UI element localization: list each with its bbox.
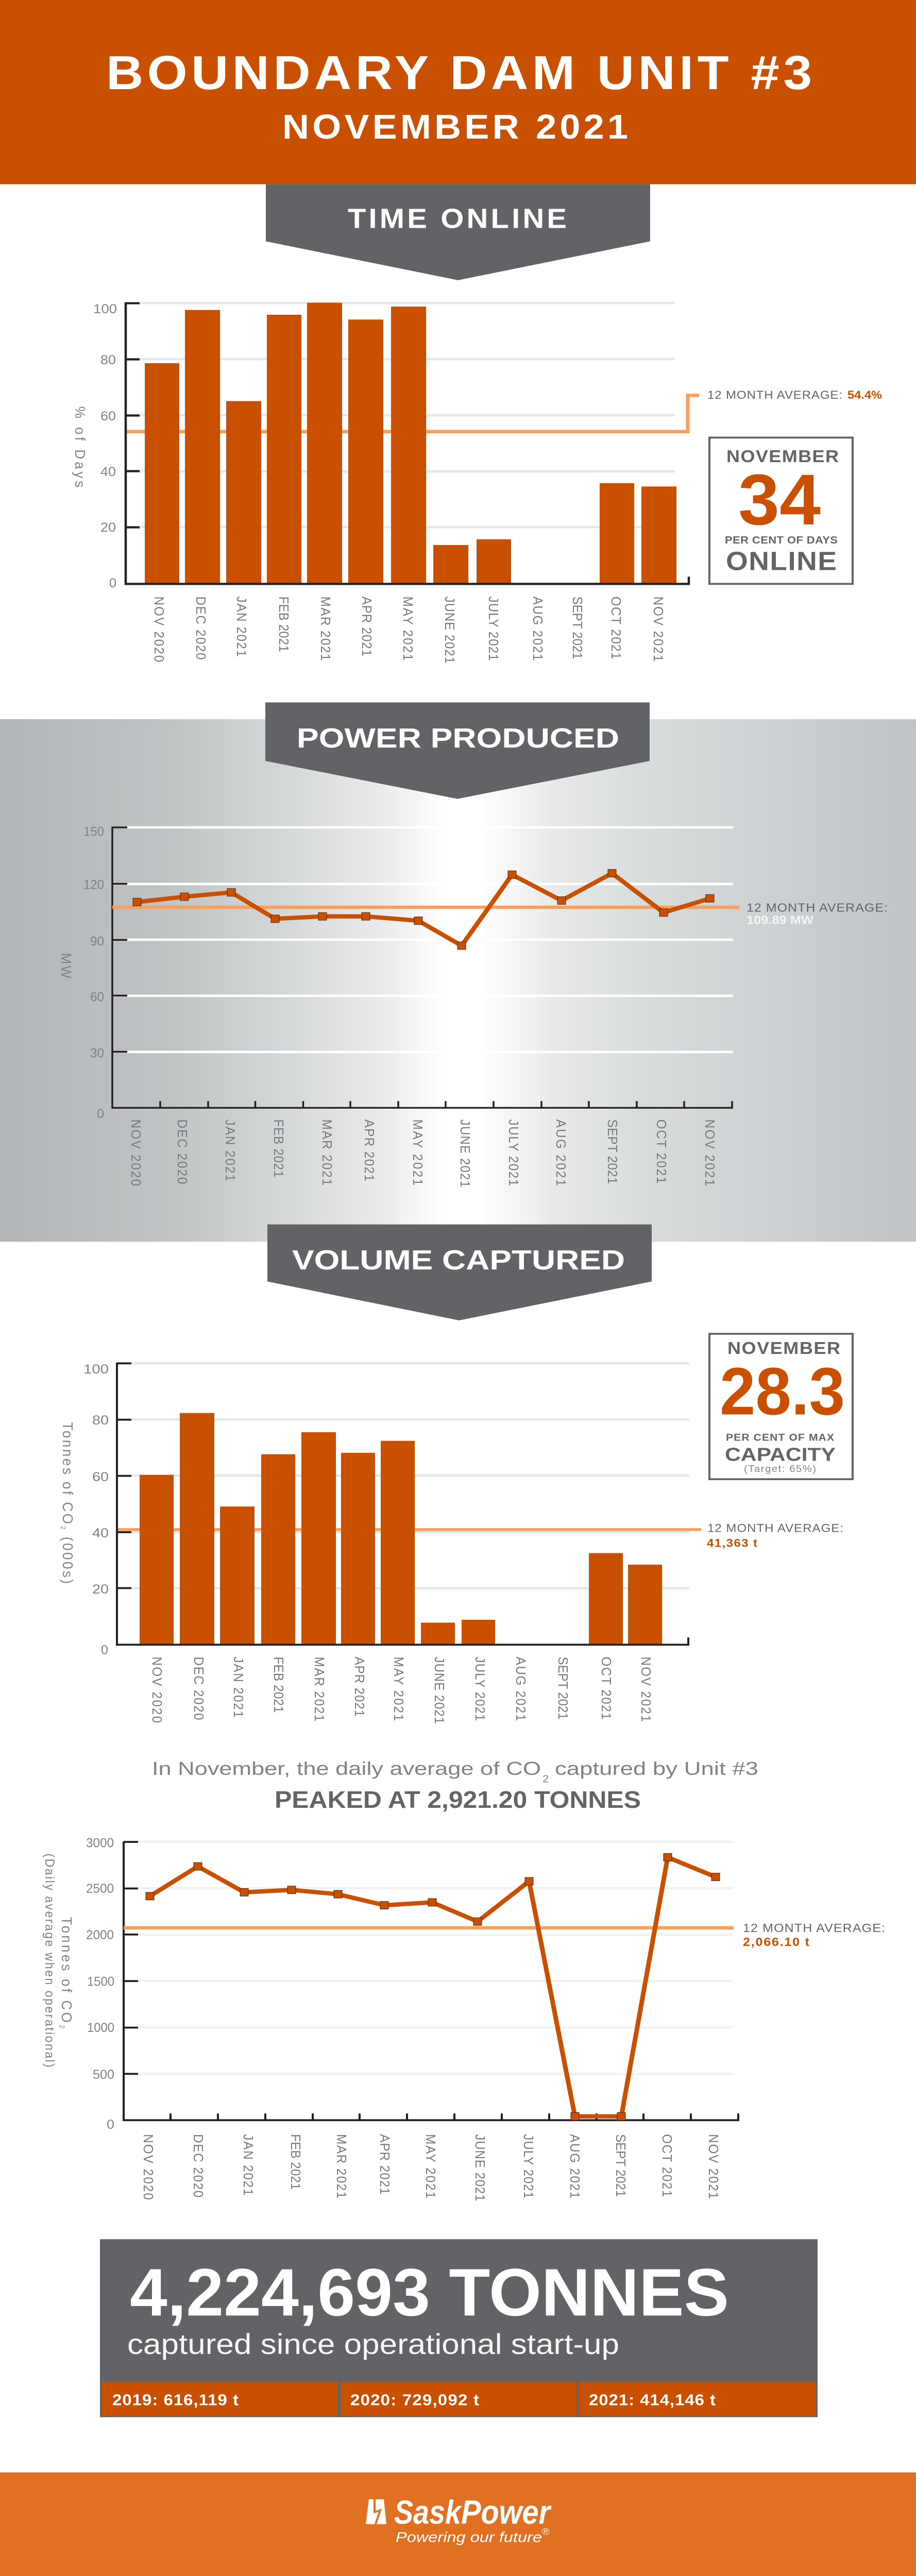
saskpower wordmark: Sask xyxy=(394,2494,463,2531)
section banner: volume captured xyxy=(267,1225,652,1320)
x axis labels: power produced: JAN 2021 xyxy=(223,1120,238,1181)
y axis labels: power produced: 30 xyxy=(90,1045,104,1060)
y axis labels: volume captured: 60 xyxy=(92,1469,109,1484)
x axis labels: time online: SEPT 2021 xyxy=(570,597,585,659)
y axis labels: time online: 40 xyxy=(100,464,116,479)
y axis labels: daily average captured: 0 xyxy=(107,2117,114,2132)
total caption: captured since operational start-up xyxy=(127,2329,619,2360)
footer band xyxy=(0,2472,916,2576)
x axis labels: power produced: MAY 2021 xyxy=(410,1120,425,1185)
section banner: time online xyxy=(266,184,650,280)
data markers: power produced xyxy=(133,869,714,950)
x axis labels: power produced: NOV 2020 xyxy=(128,1120,143,1186)
callout box: 28.3 per cent of max capacity: PER CENT OF MAX xyxy=(726,1432,834,1443)
axes: daily average captured xyxy=(124,1841,738,2120)
y axis labels: daily average captured: 2500 xyxy=(86,1881,114,1896)
x axis labels: time online: MAR 2021 xyxy=(318,597,333,660)
x axis labels: daily average captured: NOV 2020 xyxy=(141,2134,156,2200)
average label: power produced: 109.89 MW xyxy=(747,913,813,927)
average line: time online xyxy=(126,395,699,432)
callout box: 28.3 per cent of max capacity: CAPACITY xyxy=(725,1444,836,1465)
x axis labels: daily average captured: APR 2021 xyxy=(377,2134,392,2195)
callout box: 28.3 per cent of max capacity: 28.3 xyxy=(720,1354,845,1429)
axes: volume captured xyxy=(117,1363,688,1645)
y axis title: daily average captured: Tonnes of CO xyxy=(59,1917,75,2023)
y axis labels: daily average captured: 1500 xyxy=(87,1974,114,1989)
y axis title: power produced: MW xyxy=(58,953,74,978)
x axis labels: daily average captured: JUNE 2021 xyxy=(472,2134,487,2201)
callout box: 34 per cent online xyxy=(709,437,853,584)
yearly totals strip: 2021: 414,146 t xyxy=(589,2391,716,2409)
x axis labels: time online: NOV 2020 xyxy=(151,597,166,662)
x axis labels: volume captured: MAR 2021 xyxy=(312,1657,327,1721)
x axis labels: daily average captured: MAR 2021 xyxy=(334,2134,349,2198)
section banner: power produced: POWER PRODUCED xyxy=(297,722,619,753)
axes: power produced xyxy=(112,827,732,1108)
x axis labels: power produced: AUG 2021 xyxy=(553,1120,568,1186)
y axis labels: volume captured: 20 xyxy=(92,1582,109,1597)
line chart: power produced xyxy=(58,824,888,1188)
header band xyxy=(0,0,916,184)
x axis labels: volume captured: NOV 2021 xyxy=(638,1657,653,1722)
callout box: 34 per cent online: NOVEMBER xyxy=(726,447,839,466)
x axis labels: time online: JAN 2021 xyxy=(234,597,249,657)
y axis labels: time online: 0 xyxy=(109,575,116,590)
x axis labels: time online: JUNE 2021 xyxy=(442,597,457,664)
average label: volume captured: 41,363 t xyxy=(707,1536,757,1549)
average label: time online: 54.4% xyxy=(847,388,882,401)
average line: volume captured xyxy=(117,1528,701,1531)
average label: daily average captured: 2,066.10 t xyxy=(743,1936,809,1949)
y axis labels: power produced: 150 xyxy=(83,824,104,839)
y axis labels: power produced: 120 xyxy=(83,877,104,892)
average label: time online: 12 MONTH AVERAGE: xyxy=(707,388,842,401)
yearly totals strip xyxy=(102,2382,816,2416)
y axis labels: time online: 20 xyxy=(100,520,116,535)
panel: total captured xyxy=(100,2239,818,2417)
x axis labels: volume captured xyxy=(149,1657,653,1724)
x axis labels: power produced: APR 2021 xyxy=(362,1120,377,1181)
callout box: 34 per cent online: PER CENT OF DAYS xyxy=(725,534,838,546)
x axis labels: power produced: DEC 2020 xyxy=(175,1120,190,1184)
x axis labels: daily average captured: AUG 2021 xyxy=(567,2134,582,2198)
callout box: 28.3 per cent of max capacity: NOVEMBER xyxy=(727,1339,840,1358)
y axis labels: power produced: 0 xyxy=(97,1106,104,1121)
yearly totals strip: 2019: 616,119 t xyxy=(112,2391,239,2409)
y axis labels: volume captured: 80 xyxy=(92,1413,109,1428)
tagline: Powering our future xyxy=(396,2530,542,2546)
y axis labels: time online: 80 xyxy=(100,352,116,367)
average label: daily average captured xyxy=(743,1922,885,1949)
x axis labels: time online xyxy=(151,597,666,664)
x axis labels: time online: MAY 2021 xyxy=(400,597,415,660)
x axis labels: daily average captured: DEC 2020 xyxy=(191,2134,206,2197)
y axis labels: volume captured: 40 xyxy=(92,1526,109,1540)
y axis labels: power produced: 90 xyxy=(90,934,104,948)
y axis labels: time online xyxy=(93,301,117,590)
x axis labels: volume captured: NOV 2020 xyxy=(149,1657,164,1723)
x axis labels: time online: OCT 2021 xyxy=(608,597,623,659)
average line: daily average captured xyxy=(124,1926,734,1929)
average label: power produced: 12 MONTH AVERAGE: xyxy=(747,901,888,914)
bar chart: volume captured xyxy=(59,1362,843,1724)
x axis labels: power produced: SEPT 2021 xyxy=(605,1120,620,1184)
average label: daily average captured: 12 MONTH AVERAGE: xyxy=(743,1922,885,1935)
y axis title: daily average captured: (Daily average when operational) xyxy=(42,1854,57,2067)
x axis labels: time online: FEB 2021 xyxy=(276,597,291,652)
icon: saskpower logo mark xyxy=(366,2499,386,2524)
x axis labels: daily average captured: JAN 2021 xyxy=(241,2134,256,2196)
x axis labels: daily average captured: MAY 2021 xyxy=(423,2134,438,2198)
y axis labels: daily average captured: 3000 xyxy=(86,1835,114,1850)
x axis labels: time online: AUG 2021 xyxy=(530,597,545,660)
x axis labels: power produced: JULY 2021 xyxy=(506,1120,521,1186)
y axis labels: power produced: 60 xyxy=(90,989,104,1004)
x axis labels: volume captured: FEB 2021 xyxy=(271,1657,286,1713)
section banner: power produced xyxy=(265,702,650,799)
y axis labels: daily average captured: 2000 xyxy=(86,1927,114,1942)
section banner: volume captured: VOLUME CAPTURED xyxy=(292,1244,625,1276)
y axis title: volume captured: 2 xyxy=(59,1526,67,1530)
x axis labels: time online: NOV 2021 xyxy=(651,597,666,662)
x axis labels: daily average captured xyxy=(141,2134,721,2201)
bars: volume captured xyxy=(140,1413,662,1644)
average line: power produced xyxy=(112,906,739,909)
y axis labels: time online: 100 xyxy=(93,301,117,316)
text block: daily average headline: 2 xyxy=(542,1773,549,1785)
saskpower wordmark xyxy=(394,2494,552,2531)
yearly totals strip: 2020: 729,092 t xyxy=(350,2391,479,2409)
y axis labels: volume captured xyxy=(83,1362,109,1657)
y axis labels: daily average captured xyxy=(86,1835,114,2132)
axes: time online xyxy=(126,302,689,584)
x axis labels: power produced: JUNE 2021 xyxy=(457,1120,472,1188)
y axis title: daily average captured: 2 xyxy=(58,2025,66,2028)
x axis labels: power produced: NOV 2021 xyxy=(702,1120,717,1186)
line chart: daily average captured xyxy=(42,1835,885,2201)
panel: power produced xyxy=(0,702,916,1242)
x axis labels: power produced: MAR 2021 xyxy=(319,1120,334,1185)
x axis labels: power produced xyxy=(128,1120,717,1188)
text block: daily average headline: PEAKED AT 2,921.20 TONNES xyxy=(275,1787,641,1814)
saskpower wordmark: Power xyxy=(461,2494,552,2531)
data markers: daily average captured xyxy=(146,1854,720,2120)
text block: daily average headline: captured by Unit #3 xyxy=(555,1758,758,1778)
callout box: 34 per cent online: 34 xyxy=(738,460,821,540)
total tonnes figure: 4,224,693 TONNES xyxy=(130,2255,729,2330)
x axis labels: volume captured: JUNE 2021 xyxy=(432,1657,447,1724)
y axis labels: daily average captured: 1000 xyxy=(87,2020,114,2035)
x axis labels: daily average captured: SEPT 2021 xyxy=(613,2134,628,2197)
x axis labels: volume captured: SEPT 2021 xyxy=(555,1657,570,1720)
data line: daily average captured xyxy=(150,1857,716,2116)
x axis labels: volume captured: OCT 2021 xyxy=(599,1657,614,1720)
bars: time online xyxy=(145,303,676,583)
x axis labels: time online: APR 2021 xyxy=(359,597,374,656)
y axis labels: volume captured: 0 xyxy=(101,1642,108,1657)
x axis labels: volume captured: JAN 2021 xyxy=(231,1657,246,1718)
x axis labels: power produced: OCT 2021 xyxy=(654,1120,669,1183)
x axis labels: volume captured: APR 2021 xyxy=(352,1657,367,1717)
y axis title: volume captured: Tonnes of CO xyxy=(60,1422,76,1524)
y axis title: volume captured: (000s) xyxy=(60,1531,76,1584)
x axis labels: volume captured: DEC 2020 xyxy=(191,1657,206,1720)
x axis labels: daily average captured: FEB 2021 xyxy=(288,2134,303,2190)
average label: volume captured xyxy=(707,1521,843,1549)
y axis title: daily average captured xyxy=(42,1854,75,2067)
text block: daily average headline: In November, the daily average of CO xyxy=(152,1758,541,1778)
text block: daily average headline xyxy=(152,1758,758,1814)
y axis labels: time online: 60 xyxy=(100,409,116,423)
x axis labels: volume captured: AUG 2021 xyxy=(513,1657,528,1721)
x axis labels: daily average captured: NOV 2021 xyxy=(706,2134,721,2199)
x axis labels: volume captured: JULY 2021 xyxy=(472,1657,487,1721)
tagline: ® xyxy=(542,2527,550,2537)
callout box: 34 per cent online: ONLINE xyxy=(726,547,837,576)
x axis labels: time online: DEC 2020 xyxy=(193,597,208,659)
average label: volume captured: 12 MONTH AVERAGE: xyxy=(707,1521,843,1534)
x axis labels: daily average captured: JULY 2021 xyxy=(521,2134,536,2198)
section banner: time online: TIME ONLINE xyxy=(348,202,567,234)
callout box: 28.3 per cent of max capacity xyxy=(709,1334,853,1479)
callout box: 28.3 per cent of max capacity: (Target: 65%) xyxy=(744,1464,816,1475)
x axis labels: volume captured: MAY 2021 xyxy=(391,1657,406,1721)
y axis title: time online: % of Days xyxy=(72,406,88,487)
x axis labels: power produced: FEB 2021 xyxy=(271,1120,286,1177)
x axis labels: time online: JULY 2021 xyxy=(486,597,501,660)
subtitle: NOVEMBER 2021 xyxy=(282,107,628,146)
data line: power produced xyxy=(137,873,710,946)
y axis labels: daily average captured: 500 xyxy=(93,2067,114,2082)
y axis labels: power produced xyxy=(83,824,104,1121)
title: BOUNDARY DAM UNIT #3 xyxy=(106,46,812,99)
y axis labels: volume captured: 100 xyxy=(83,1362,109,1377)
x axis labels: daily average captured: OCT 2021 xyxy=(659,2134,674,2197)
bar chart: time online xyxy=(72,301,882,664)
average label: power produced xyxy=(747,901,888,927)
